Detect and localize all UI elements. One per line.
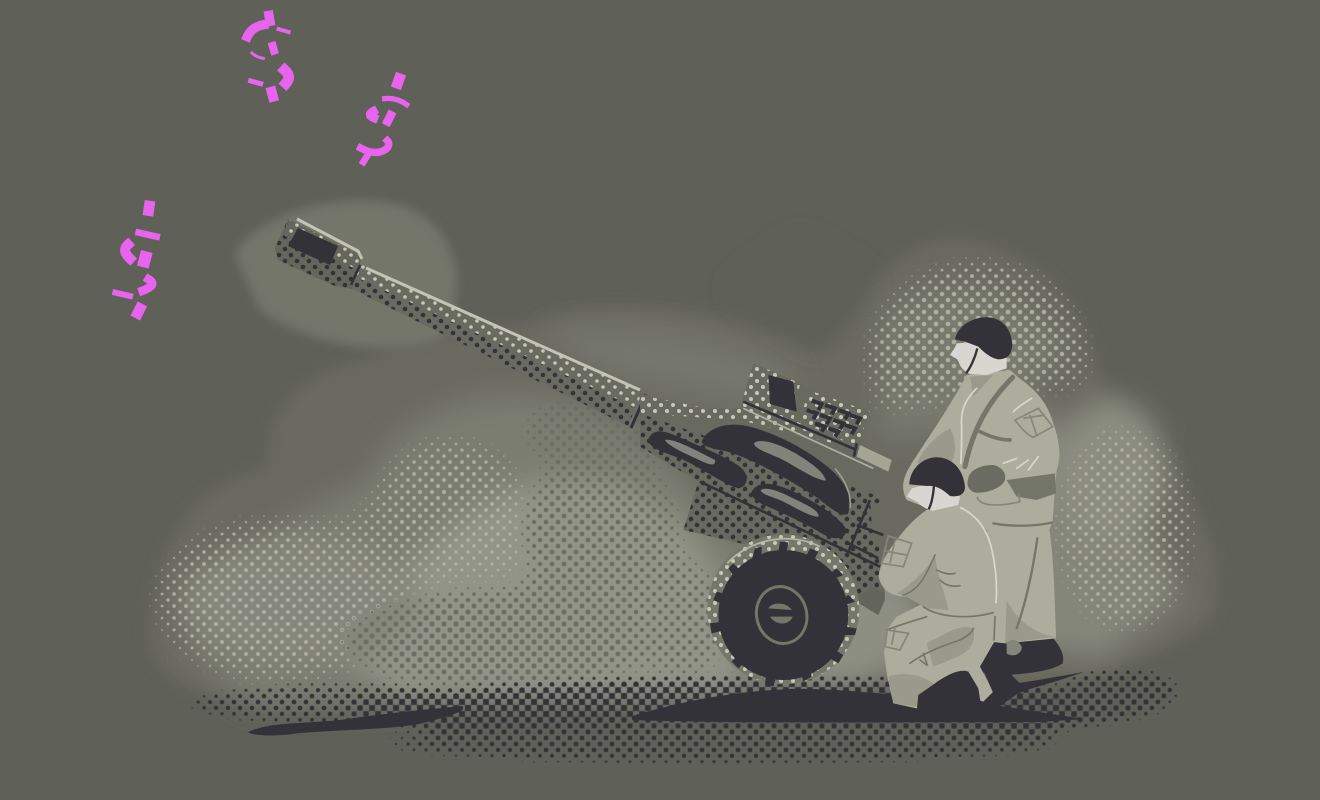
standing soldier: far boot bbox=[962, 638, 1063, 675]
standing soldier: helmet bbox=[955, 317, 1012, 359]
icon: dollar sign, top bbox=[247, 15, 289, 97]
kneeling soldier: rear boot bbox=[983, 667, 1027, 697]
kneeling soldier: face bbox=[907, 482, 960, 511]
standing soldier: chin strap bbox=[966, 348, 977, 373]
kneeling soldier bbox=[879, 457, 1027, 712]
solid ground shadow, left streak bbox=[248, 706, 463, 736]
standing soldier: coat highlights bbox=[961, 388, 1038, 470]
dark dome cover bbox=[702, 425, 850, 515]
halftone ground shadow bbox=[191, 666, 1177, 764]
instrument plate with rows of marks bbox=[800, 390, 870, 447]
icon: dollar sign, right bbox=[361, 79, 407, 162]
trunnion bar bbox=[854, 443, 892, 472]
standing soldier: coat and trousers bbox=[903, 370, 1059, 643]
kneeling soldier: clothing shadow bbox=[888, 553, 974, 707]
halftone smoke dots, light bbox=[150, 257, 1200, 685]
standing soldier: trouser lines bbox=[993, 523, 1052, 628]
kneeling soldier: boot bbox=[917, 671, 981, 712]
standing soldier: coat shadow bbox=[917, 375, 1055, 643]
kneeling soldier: clothing lines bbox=[887, 555, 995, 665]
cannon body bbox=[640, 363, 890, 615]
standing soldier bbox=[903, 317, 1063, 675]
cannon barrel and muzzle brake bbox=[275, 219, 646, 428]
dark recoil slot, lower bbox=[752, 484, 847, 538]
cannon carriage, wheel and soldiers (coordinates in 3x detail space) bbox=[640, 317, 1063, 712]
standing soldier: sleeve pocket bbox=[1015, 408, 1053, 437]
standing soldier: glove bbox=[967, 465, 1005, 493]
boot tag between the standing soldier's feet bbox=[1007, 640, 1022, 655]
smoke cloud bbox=[150, 201, 1217, 705]
kneeling soldier: body bbox=[879, 505, 998, 708]
kneeling soldier: helmet bbox=[909, 457, 965, 496]
wheel bbox=[707, 534, 859, 687]
standing soldier: chest strap bbox=[980, 432, 1010, 440]
solid ground shadow under cannon and soldiers bbox=[632, 672, 1084, 722]
halftone smoke dots, dark grey bbox=[340, 402, 720, 686]
wheel hub bbox=[750, 581, 813, 649]
kneeling soldier: sleeve pocket bbox=[882, 536, 912, 567]
icon: dollar sign, left bbox=[115, 206, 157, 313]
dark recoil slot, left bbox=[648, 431, 747, 488]
standing soldier: face bbox=[950, 342, 1007, 375]
kneeling soldier: shoulder highlight bbox=[960, 507, 997, 603]
kneeling soldier: chin strap bbox=[929, 485, 934, 509]
kneeling soldier: thigh pocket bbox=[885, 628, 908, 650]
sight box bbox=[768, 375, 797, 412]
standing soldier: shoulder strap bbox=[965, 377, 1013, 467]
standing soldier: belt bbox=[1007, 473, 1056, 500]
illustration: soldiers firing a howitzer that shoots dollar signs bbox=[112, 10, 1212, 764]
